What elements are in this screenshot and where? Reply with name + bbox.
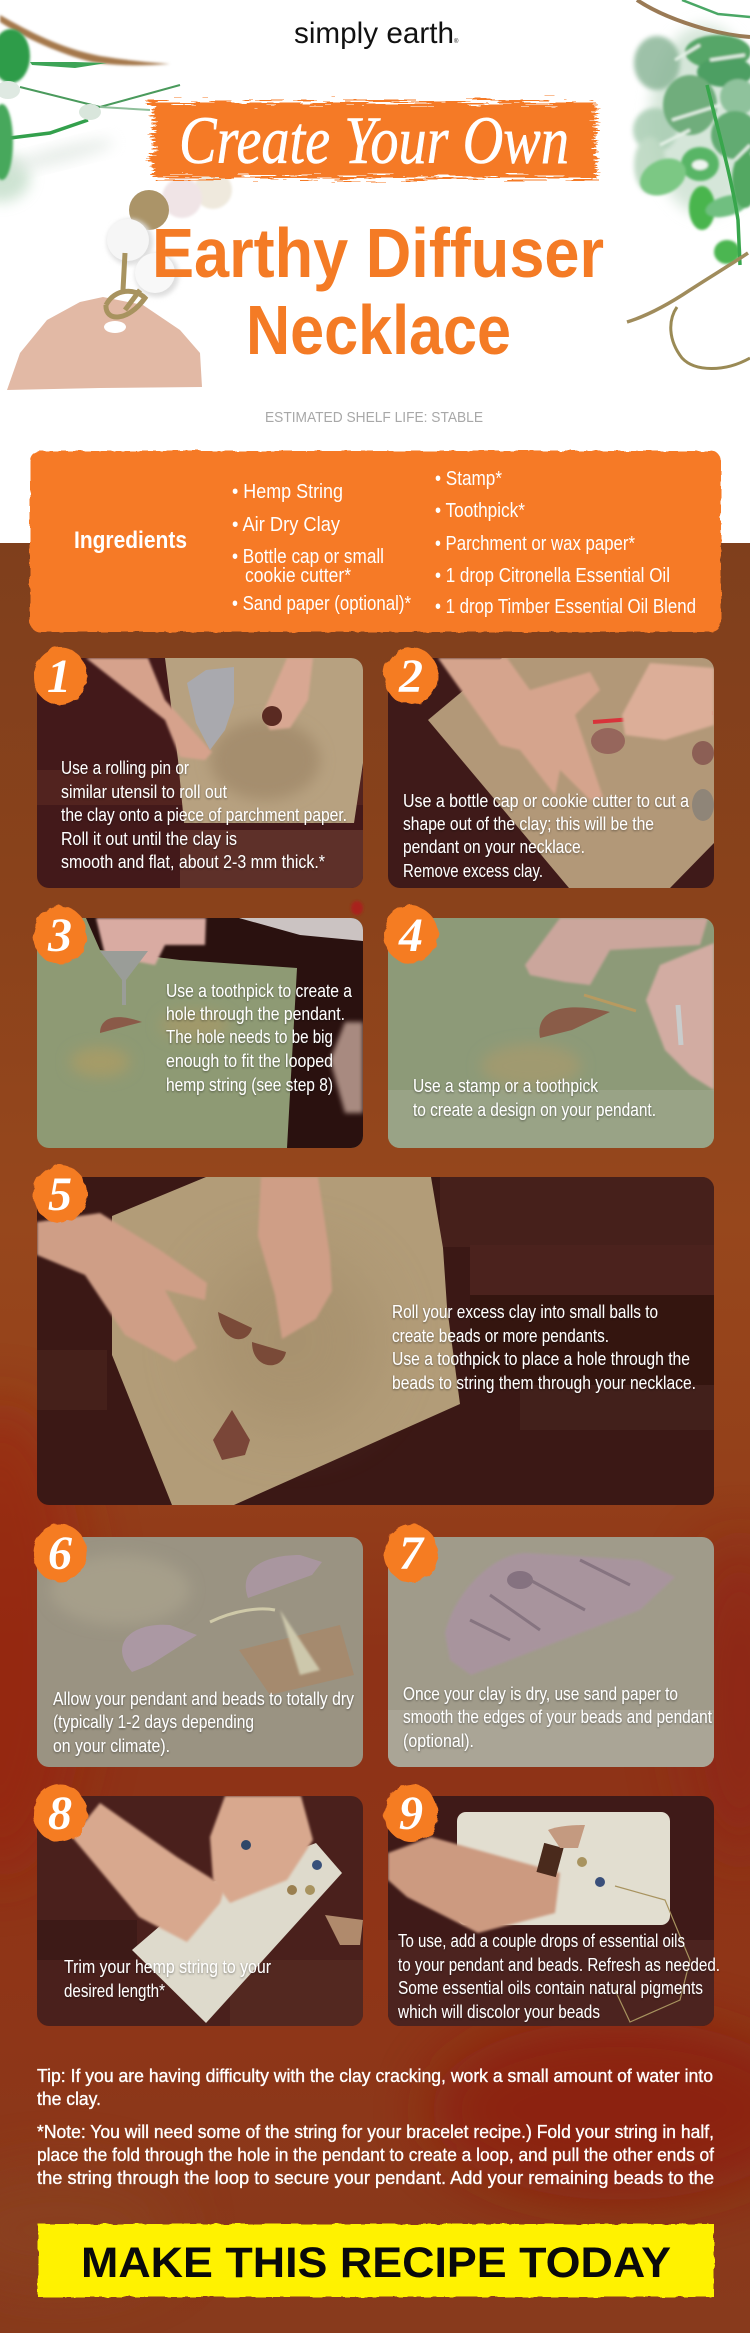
banner: create your own: Create Your Own	[179, 102, 569, 178]
step 3 photo and text: hemp string (see step 8)	[166, 1075, 333, 1095]
step 3 photo and text: The hole needs to be big	[166, 1027, 333, 1047]
panel: ingredients	[30, 451, 721, 632]
step 5 photo and text: Roll your excess clay into small balls to	[392, 1302, 658, 1322]
step 2 photo and text: Use a bottle cap or cookie cutter to cut a	[403, 791, 690, 811]
step 9 photo and text: which will discolor your beads	[397, 2002, 600, 2022]
step 3 photo and text: enough to fit the looped	[166, 1051, 333, 1071]
step number badges: 2	[398, 650, 423, 703]
step number badges: 7	[399, 1527, 425, 1580]
step 2 photo and text: pendant on your necklace.	[403, 837, 585, 857]
tip and note text: *Note: You will need some of the string for your bracelet recipe.) Fold your string in half,	[37, 2122, 714, 2142]
step 5 photo and text: beads to string them through your necklace.	[392, 1373, 696, 1393]
panel: ingredients: • 1 drop Timber Essential Oil Blend	[435, 596, 696, 618]
step 1 photo and text: smooth and flat, about 2-3 mm thick.*	[61, 852, 325, 872]
step number badges: 9	[399, 1787, 423, 1840]
step 3 photo and text: hole through the pendant.	[166, 1004, 345, 1024]
step 3 photo and text: Use a toothpick to create a	[166, 981, 353, 1001]
main title: Earthy Diffuser	[152, 214, 604, 292]
tip and note text: Tip: If you are having difficulty with the clay cracking, work a small amount of water into	[37, 2066, 713, 2086]
step 2 photo and text: Remove excess clay.	[403, 861, 543, 881]
step 2 photo and text: shape out of the clay; this will be the	[403, 814, 654, 834]
step number badges: 4	[398, 909, 423, 962]
step 5 photo and text: Use a toothpick to place a hole through the	[392, 1349, 690, 1369]
step 9 photo and text: To use, add a couple drops of essential oils	[398, 1931, 685, 1951]
panel: ingredients: Ingredients	[74, 527, 187, 554]
logo: simply earth: simply earth	[294, 17, 454, 50]
panel: ingredients: • Air Dry Clay	[232, 514, 340, 536]
main title	[152, 214, 604, 369]
panel: ingredients: • Hemp String	[232, 481, 343, 503]
step number badges	[33, 647, 438, 1842]
step number badges: 1	[47, 650, 71, 703]
step 5 photo and text: create beads or more pendants.	[392, 1326, 609, 1346]
step 1 photo and text	[37, 658, 363, 888]
panel: ingredients: • Stamp*	[435, 468, 502, 490]
tip and note text	[37, 2066, 715, 2188]
step 7 photo and text	[388, 1537, 714, 1767]
step 9 photo and text: Some essential oils contain natural pigments	[398, 1978, 703, 1998]
step 1 photo and text: the clay onto a piece of parchment paper.	[61, 805, 347, 825]
step 1 photo and text: Use a rolling pin or	[61, 758, 189, 778]
step 7 photo and text: (optional).	[403, 1731, 474, 1751]
step 7 photo and text: Once your clay is dry, use sand paper to	[403, 1684, 678, 1704]
step 5 photo and text	[37, 1177, 714, 1505]
panel: ingredients: cookie cutter*	[245, 565, 351, 587]
right foliage decoration	[627, 0, 750, 368]
step 8 photo and text	[37, 1796, 363, 2026]
logo: simply earth: ®	[454, 38, 459, 45]
panel: ingredients: • Parchment or wax paper*	[435, 533, 635, 555]
step 1 photo and text: similar utensil to roll out	[61, 782, 227, 802]
step 6 photo and text: Allow your pendant and beads to totally dry	[53, 1689, 354, 1709]
step 4 photo and text: Use a stamp or a toothpick	[413, 1076, 599, 1096]
step 8 photo and text: Trim your hemp string to your	[64, 1957, 271, 1977]
main title: Necklace	[246, 291, 511, 369]
step 4 photo and text: to create a design on your pendant.	[413, 1100, 656, 1120]
call to action banner	[38, 2224, 714, 2297]
step 6 photo and text: (typically 1-2 days depending	[53, 1712, 254, 1732]
step 2 photo and text	[388, 658, 714, 888]
necklace photo	[7, 171, 232, 390]
panel: ingredients: • Sand paper (optional)*	[232, 593, 411, 615]
step number badges: 3	[47, 909, 72, 962]
step 9 photo and text	[388, 1796, 720, 2026]
step number badges: 5	[48, 1168, 72, 1221]
panel: ingredients: • 1 drop Citronella Essential Oil	[435, 565, 670, 587]
left foliage decoration	[0, 15, 180, 202]
step 8 photo and text: desired length*	[64, 1981, 165, 2001]
step number badges: 6	[48, 1527, 72, 1580]
tip and note text: the clay.	[37, 2089, 101, 2109]
panel: ingredients: • Bottle cap or small	[232, 546, 384, 568]
tip and note text: place the fold through the hole in the pendant to create a loop, and pull the other ends of	[37, 2145, 715, 2165]
step number badges: 8	[48, 1787, 72, 1840]
step 4 photo and text	[388, 918, 714, 1148]
step 1 photo and text: Roll it out until the clay is	[61, 829, 237, 849]
call to action banner: MAKE THIS RECIPE TODAY	[81, 2239, 671, 2287]
step 6 photo and text	[37, 1537, 363, 1767]
tip and note text: the string through the loop to secure your pendant. Add your remaining beads to the	[37, 2168, 714, 2188]
step 3 photo and text	[37, 918, 363, 1148]
shelf life note: ESTIMATED SHELF LIFE: STABLE	[265, 409, 483, 426]
panel: ingredients: • Toothpick*	[435, 500, 525, 522]
step 6 photo and text: on your climate).	[53, 1736, 170, 1756]
